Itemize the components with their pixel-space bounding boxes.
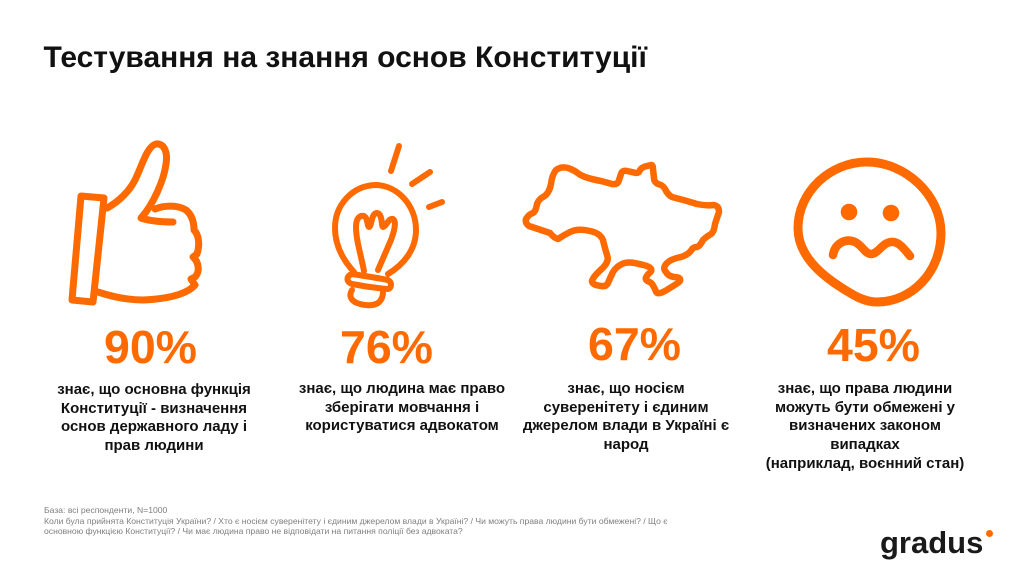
text block: 90% description: знає, що основна функція (57, 381, 251, 398)
text block: 67% description: народ (603, 436, 649, 453)
text block: 90% description: прав людини (104, 437, 204, 454)
statistic: 76%: 76% (340, 321, 433, 373)
text block: 67% description (522, 380, 729, 453)
statistic: 90%: 90% (104, 321, 197, 373)
title: Тестування на знання основ Конституції (44, 41, 647, 74)
text block: 45% description: (наприклад, воєнний стан) (766, 455, 964, 472)
text block: 45% description: визначених законом (789, 417, 941, 434)
text block: 45% description: можуть бути обмежені у (775, 399, 955, 416)
icon: sad face (798, 162, 941, 302)
text block: 90% description: основ державного ладу і (61, 418, 247, 435)
text block: 90% description (57, 381, 251, 454)
footnote: основною функцією Конституції? / Чи має людина право не відповідати на питання поліції без адвоката? (44, 526, 463, 536)
footnote (44, 505, 668, 536)
footnote: Коли була прийнята Конституція України? / Хто є носієм суверенітету і єдиним джерелом влади в Україні? / Чи можуть права людини бути обмежені? / Що є (44, 516, 668, 526)
text block: 45% description: випадках (830, 436, 900, 453)
logo: gradus: gradus (880, 525, 983, 560)
text block: 76% description: користуватися адвокатом (305, 417, 499, 434)
text block: 45% description: знає, що права людини (778, 380, 952, 397)
text block: 76% description (299, 380, 505, 434)
text block: 67% description: суверенітету і єдиним (543, 399, 709, 416)
icon: light bulb (335, 146, 442, 305)
text block: 90% description: Конституції - визначення (61, 400, 247, 417)
statistic: 45%: 45% (827, 319, 920, 371)
footnote: База: всі респонденти, N=1000 (44, 505, 167, 515)
icon: thumbs up (72, 144, 199, 302)
text block: 45% description (766, 380, 964, 472)
icon: map of Ukraine (526, 165, 719, 293)
text block: 67% description: знає, що носієм (567, 380, 685, 397)
text block: 76% description: зберігати мовчання і (325, 399, 479, 416)
text block: 76% description: знає, що людина має право (299, 380, 505, 397)
text block: 67% description: джерелом влади в Україні є (523, 417, 729, 434)
statistic: 67%: 67% (588, 318, 681, 370)
